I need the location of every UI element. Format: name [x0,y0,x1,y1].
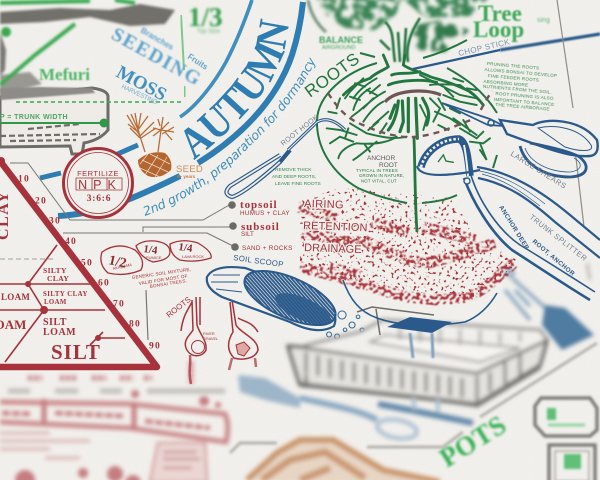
silty clay loam second line: LOAM [44,299,67,306]
mountain fill [250,442,440,480]
left fine roots [327,78,407,160]
scale 90: 90 [149,342,161,352]
sand caption: SAND + ROCKS [242,245,293,252]
right root tail [229,358,256,370]
one quarter: 1/4 [143,243,159,257]
brush head [542,305,594,350]
lower foliage [0,72,42,94]
chop stick label: CHOP STICK [457,37,511,58]
chop stick far [500,34,600,50]
growth caption: 2nd growth, preparation for dormancy [144,57,316,216]
panel: blurred brush tool [505,263,594,350]
panel: layered soil [298,188,520,300]
panel: root hook [226,114,345,197]
note line 4: ABSORBING MORE [483,79,529,88]
tweezer handle over tray [357,307,434,335]
sand leader [63,233,235,247]
subsoil leader [143,227,231,232]
grey dashes [8,388,225,394]
tree loop title [473,1,550,42]
blade [442,103,504,126]
balance text: BALANCE [319,35,363,45]
npk boxes [76,178,122,190]
brush ring [506,270,514,276]
table outline [0,402,228,442]
triangle frame [0,161,157,367]
octagon [535,398,597,436]
tap root [414,138,417,232]
note line 3: FINE FEEDER ROOTS [488,73,539,83]
subsoil dot [229,222,237,230]
fruits label: Fruits [186,52,210,72]
scoop body [207,267,335,330]
cone pattern [140,154,170,177]
one half: 1/2 [107,253,128,272]
tray inner [370,335,520,362]
panel: blurred red table [0,362,228,480]
scale 80: 80 [129,320,141,330]
pumice blob [136,241,170,262]
wire dot [1,27,11,37]
second handle lower [478,178,600,258]
river gravel label: RIVER [203,332,215,336]
hook tip [288,120,345,150]
tool loop [376,417,418,441]
panel: blurred bonsai at top left [0,0,175,94]
splitter head teeth [421,139,459,167]
subsoil label: subsoil [241,221,280,233]
scale 60: 60 [98,278,110,288]
shears label: LARGE SHEARS [509,149,568,191]
balance label [319,35,363,51]
table dividers [44,399,134,430]
trunk width label: P = TRUNK WIDTH [0,114,68,121]
lower handle inner [525,148,580,172]
front ribs [306,352,520,402]
chop stick near [413,50,500,69]
silty clay label: SILTY [43,266,67,275]
tool head [238,375,300,408]
panel: large shears [442,103,598,191]
sprout stems and needles [127,113,174,152]
tray foot [304,375,308,388]
splitter head white core [464,145,468,176]
hook note: REMOVE THICK [275,167,312,173]
silt loam label: SILT [43,317,67,328]
npk letters: NPK [78,178,122,192]
mesh legs [410,333,433,358]
panel: pot shape rectangle [549,445,595,480]
pot stipple [0,124,100,141]
rectangle [549,445,595,480]
mixture note third line: BONSAI TREES. [149,278,187,289]
moss caption: HARVESTING [120,84,158,106]
upper foliage [400,0,490,18]
river gravel second line: GRAVEL [203,337,218,341]
anchor note: TYPICAL IN TREES [356,168,398,173]
brown cut line [328,91,492,137]
hook handle outer [226,150,290,197]
topsoil caption: HUMUS + CLAY [240,210,290,217]
pot rim shading [0,87,95,100]
note line 7: IMPORTANT TO BALANCE [494,97,555,107]
pivot [488,120,494,126]
anchor note third line: NOT VITAL, CUT [361,178,397,184]
arm legs [414,397,438,412]
left foliage [316,0,402,30]
green square [547,408,556,420]
panel: autumn band [39,0,316,219]
sand dot [231,243,239,251]
sling word: sing [537,17,550,24]
dense bands [298,207,515,300]
panel: seed sprout [127,113,203,179]
fraction: 1/3 [188,2,223,32]
moss heading: MOSS [113,62,170,106]
hook tip inner [288,120,345,150]
note line 2: ALLOWS BONSAI TO DEVELOP [484,67,557,78]
branches label: Branches [139,26,176,52]
Mefuri label: Mefuri [39,65,90,84]
lower handle [520,143,586,177]
mountain shading [262,452,365,480]
anchor note second line: GROWN IN NATURE, [359,173,404,178]
note line 5: NUTRIENTS FROM THE SOIL. [483,84,552,95]
hook note second line: AND DEEP ROOTS, [272,174,316,180]
fraction one third [188,2,223,35]
scale 70: 70 [113,300,125,310]
chop stick [413,34,600,69]
loop word: Loop [473,17,524,42]
trunk width line [0,122,104,124]
trunk width dot [100,118,108,128]
topsoil label: topsoil [240,199,277,211]
roots label: ROOTS [165,295,193,320]
left branch arc [308,0,326,32]
anchor label: ANCHOR DEEP [497,204,530,251]
retention label: RETENTION [303,220,368,234]
inner frame [555,451,589,480]
pivot [464,178,470,184]
panel: soil leader lines [10,163,235,340]
root hook label: ROOT HOOK [280,114,320,148]
seeding heading: SEEDING [108,23,206,91]
akadama label: AKADAMA [112,262,133,271]
scoop opening [237,260,343,336]
loop arcs [317,40,497,203]
right pebble [236,342,250,356]
bottom blobs [15,466,141,480]
scale 10: 10 [18,174,30,184]
note line 6: ROOT PRUNING IS ALSO [495,91,554,101]
panel: root pruning notes [481,61,558,112]
grey blurred frame lines [230,343,597,453]
pink box [150,443,207,480]
upper handle hole [538,127,592,151]
vertical green guide [181,15,185,97]
mixture note second line: VALID FOR MOST OF [138,273,188,286]
mixture note: GENERIC SOIL MIXTURE, [131,267,191,280]
green caption [548,424,585,426]
grey side line [587,263,590,280]
top wire [0,0,135,3]
panel: tree foliage [308,0,490,52]
inner dividing lines [0,245,125,362]
drainage label: DRAINAGE [304,242,362,256]
top dots [131,390,221,408]
right foliage [412,20,470,52]
splitter inner root [438,155,453,162]
lava rock blob [170,241,211,261]
scale 30: 30 [49,216,61,226]
topsoil leader [10,163,231,220]
loam label: LOAM [1,292,30,302]
splitter head outer [421,139,470,176]
mountain ridge [247,440,440,480]
panel: wire and mesh [343,280,497,358]
mesh [387,317,452,333]
body hatch [211,275,242,292]
soil beads in scoop [271,287,335,331]
fraction caption: Top Size [197,29,221,35]
first handle [464,178,590,300]
pine cone [138,152,171,177]
panel: blurred mountain [247,440,440,480]
foliage [0,4,175,26]
root label: ROOT [379,162,398,169]
silt label: SILT [51,340,101,364]
beads spilling [327,311,364,339]
topsoil dot [228,201,236,209]
first handle inner [470,172,595,292]
lava rock label: LAVA ROCK [182,254,204,259]
green branch wire [0,24,75,85]
panel: soil triangle [0,157,157,367]
brown pruning arc [385,91,441,102]
left root [181,297,206,356]
tree trunk [380,18,420,62]
thin outer arc [180,0,252,117]
autumn heading: AUTUMN [184,18,289,160]
thick lower arc left [58,176,180,216]
root detail network [327,55,490,162]
grey dashed guide [0,258,56,260]
right fine roots [420,75,490,160]
tray shadow [300,367,540,405]
airing label: AIRING [304,198,344,211]
one quarter second: 1/4 [178,241,194,255]
panel: trunk splitter [417,139,600,300]
upper handle [500,120,598,156]
pink box text [163,452,200,468]
wire [343,280,497,325]
tray rim [300,320,547,373]
lower jaw [417,166,480,175]
seed label: SEED [176,164,203,175]
splitter label: TRUNK SPLITTER [528,212,589,263]
second handle upper [477,167,600,240]
panel: root cross-sections [165,295,258,384]
panel: blurred wire cutter [238,375,473,441]
scoop label: SOIL SCOOP [233,253,284,269]
note line 8: THE TREE AIRBORAGE [495,102,550,112]
akadama blob [101,246,143,274]
note line 1: PRUNING THE ROOTS [487,61,540,71]
fertilize label: FERTILIZE [77,169,119,178]
left root tail [190,355,191,384]
tray outline [288,340,547,404]
dashed green guide [16,101,182,103]
scale 40: 40 [65,237,77,247]
pot body [0,88,108,154]
apex cap [0,157,5,165]
pumice label: PUMICE [146,255,162,260]
subsoil caption: SILT [241,231,254,238]
table text [2,413,210,428]
inner ring [68,152,128,214]
right root [229,300,258,359]
silty clay label second line: CLAY [47,274,69,283]
scale 20: 20 [35,196,47,206]
hook handle inner [226,155,280,197]
panel: bonsai pot [0,87,182,154]
panel: soil scoop [207,253,364,339]
sparse scatter [300,188,520,300]
left pebble [192,340,204,354]
ratio: 3:6:6 [87,194,111,204]
root label: ROOT, ANCHOR [531,238,576,278]
panel: bonsai tray [288,320,547,405]
thick lower arc right [198,2,303,163]
roots heading: ROOTS [301,49,363,101]
middle arc segments [40,145,138,178]
tree word: Tree [478,1,522,26]
tool handle [300,398,377,420]
balance caption: AIRGROUND [322,45,356,51]
back ribs [400,325,520,346]
silt loam second line: LOAM [43,327,76,338]
panel: soil mixture ratios [101,241,211,289]
panel: roots diagram [301,40,497,232]
seed age: 6+ years [177,174,196,179]
silty clay loam label: SILTY CLAY [43,291,88,298]
tool arm [378,404,473,423]
scale 50: 50 [81,258,93,268]
outer ring [64,148,132,218]
hook note third line: LEAVE FINE ROOTS [275,181,321,187]
panel: soil layer labels [228,199,293,252]
panel: triangle scale numbers [18,174,161,352]
anchor label: ANCHOR [367,155,395,162]
vertical marker [146,290,148,340]
pots heading: POTS [434,409,512,473]
junction dots [25,281,101,341]
trunk [0,32,6,76]
handle engraving [480,171,545,206]
central thick roots [388,98,429,138]
crown roots [343,55,483,105]
note lines [0,433,90,458]
scale ticks [28,362,191,383]
panel: vertical grey divider [557,0,584,227]
brush stem [505,278,550,320]
panel: pot shape octagon [535,398,597,436]
panel: fertilize badge [64,148,132,218]
green square [564,454,581,469]
